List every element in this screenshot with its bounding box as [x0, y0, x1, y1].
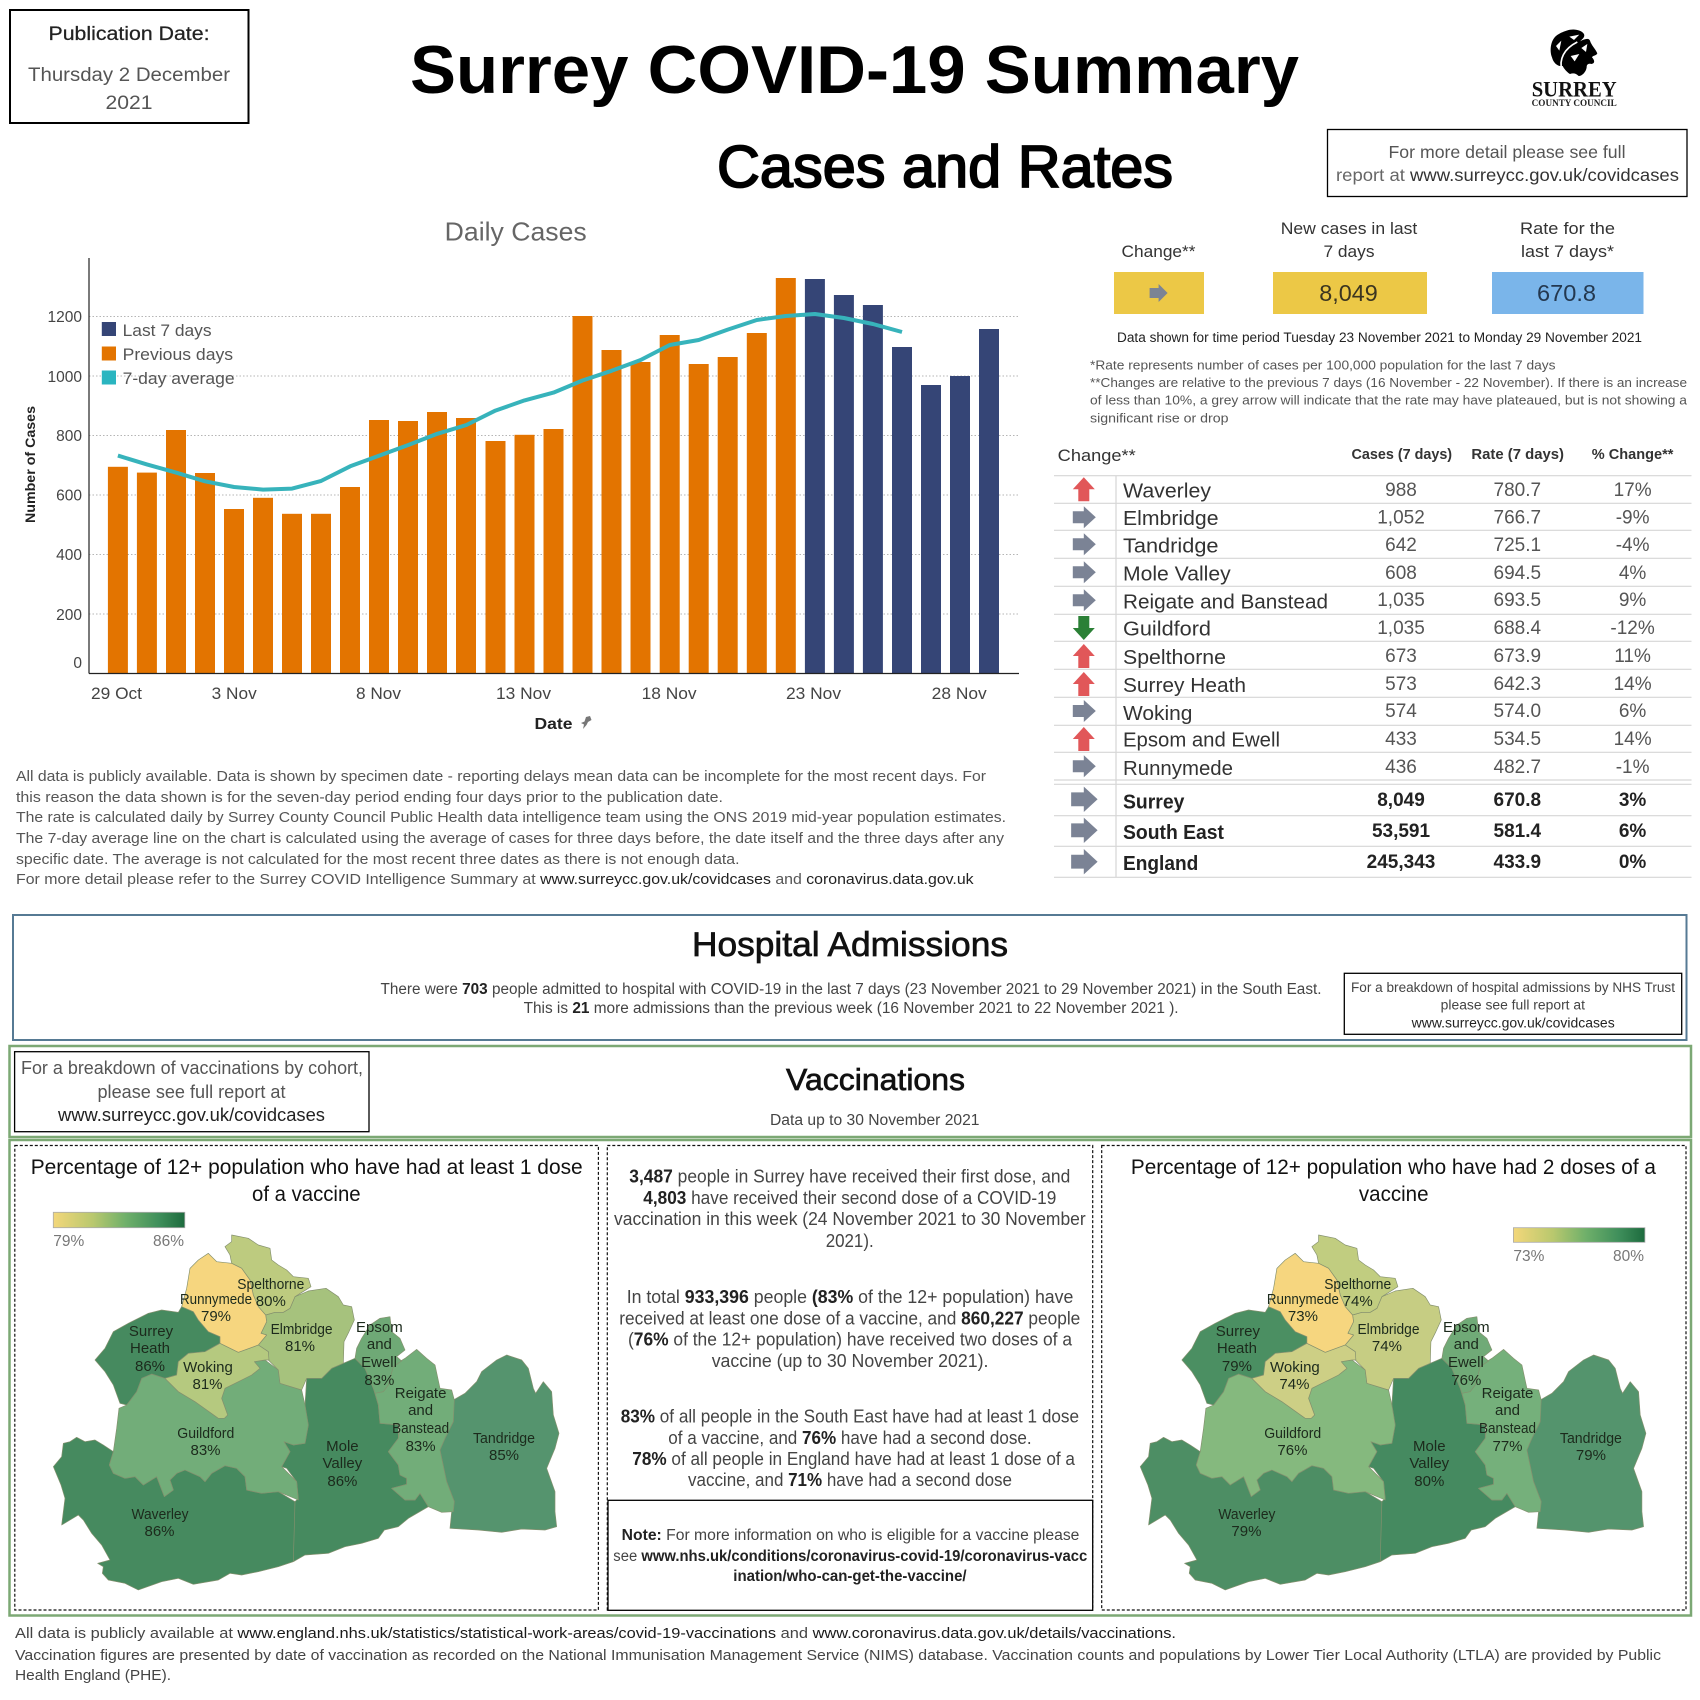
table header [1058, 446, 1674, 465]
x axis labels: 18 Nov [642, 685, 697, 703]
KPI: rate: last 7 days* [1521, 242, 1614, 261]
KPI: rate [1492, 219, 1644, 314]
map labels: second dose: 76% [1451, 1372, 1481, 1389]
row: Epsom and Ewell: 433 [1385, 729, 1417, 750]
row: Surrey Heath: 573 [1385, 674, 1417, 695]
subtitle: cases and rates: Cases and Rates [717, 134, 1173, 200]
regional comparison text: of a vaccine, and 76% have had a second dose. [668, 1428, 1032, 1448]
x axis title: Date [534, 716, 573, 733]
publication date box [10, 10, 248, 123]
weekly doses text: 3,487 people in Surrey have received their first dose, and [629, 1167, 1070, 1187]
row: Waverley: Waverley [1123, 480, 1211, 502]
map labels: first dose: Epsom [356, 1319, 403, 1336]
map labels: first dose: 81% [285, 1338, 315, 1355]
legend: first dose [53, 1212, 185, 1250]
row: Tandridge: -4% [1616, 535, 1650, 556]
row: Surrey Heath [1073, 672, 1652, 697]
y axis labels: 0 [73, 655, 82, 672]
map labels: second dose: Elmbridge [1358, 1321, 1420, 1338]
table header: Change** [1058, 446, 1136, 465]
row: Guildford: 1,035 [1377, 618, 1425, 639]
note box: ination/who-can-get-the-vaccine/ [733, 1568, 967, 1585]
row: England: 245,343 [1367, 852, 1435, 873]
x axis labels: 28 Nov [932, 685, 987, 703]
regional comparison text: 83% of all people in the South East have had at least 1 dose [621, 1406, 1079, 1426]
map labels: second dose: Waverley [1218, 1506, 1276, 1523]
map labels: second dose: Runnymede [1267, 1291, 1339, 1308]
chart legend: Last 7 days [123, 322, 212, 340]
row: Runnymede: Runnymede [1123, 758, 1233, 780]
admissions text: This is 21 more admissions than the previous week (16 November 2021 to 22 November 2021 ). [524, 1000, 1179, 1017]
cumulative doses text [619, 1287, 1080, 1371]
y axis labels [48, 309, 82, 672]
cumulative doses text: (76% of the 12+ population) have received two doses of a [628, 1330, 1073, 1350]
map labels: second dose: and [1454, 1336, 1479, 1353]
x axis labels: 8 Nov [356, 685, 402, 703]
row: Runnymede: -1% [1616, 757, 1650, 778]
heading: hospital admissions: Hospital Admissions [692, 926, 1008, 964]
map labels: second dose: 79% [1231, 1523, 1261, 1540]
row: Runnymede: 436 [1385, 757, 1417, 778]
panel: vaccination summary text [607, 1146, 1093, 1610]
x axis labels: 23 Nov [786, 685, 842, 703]
y axis labels: 400 [56, 547, 82, 564]
chart: daily cases [22, 216, 1019, 733]
row: Elmbridge: Elmbridge [1123, 508, 1218, 530]
row: South East: 53,591 [1372, 821, 1430, 842]
admissions text [380, 981, 1322, 1017]
x axis labels: 13 Nov [496, 685, 552, 703]
bars: last 7 days [805, 279, 999, 673]
callout: NHS trust breakdown: For a breakdown of hospital admissions by NHS Trust [1351, 980, 1675, 995]
row: Waverley: 17% [1614, 480, 1652, 501]
map labels: second dose: Woking [1270, 1359, 1320, 1376]
map labels: second dose: Epsom [1443, 1319, 1490, 1336]
vaccination data sources note: Health England (PHE). [15, 1667, 171, 1684]
data notes under chart [16, 769, 1006, 888]
row: Tandridge: Tandridge [1123, 536, 1218, 558]
map labels: second dose: 74% [1279, 1376, 1309, 1393]
row: Runnymede [1073, 755, 1650, 780]
row: Surrey: Surrey [1123, 792, 1185, 814]
heading: first dose: Percentage of 12+ population who have had at least 1 dose [31, 1156, 583, 1179]
row: Tandridge [1073, 533, 1650, 558]
panel: first dose map [15, 1146, 598, 1610]
callout: more detail [1328, 130, 1687, 196]
row: Mole Valley: 4% [1619, 563, 1646, 584]
table header: Rate (7 days) [1471, 447, 1564, 463]
data notes under chart: specific date. The average is not calculated for the most recent three dates as there is not enough data. [16, 852, 739, 868]
regional comparison text [621, 1406, 1079, 1490]
row: Elmbridge [1073, 506, 1650, 530]
data notes under chart: this reason the data shown is for the seven-day period ending four days prior to the publication date. [16, 790, 723, 806]
row: Spelthorne: 11% [1614, 646, 1651, 667]
table header: % Change** [1592, 447, 1674, 463]
weekly doses text: vaccination in this week (24 November 2021 to 30 November [614, 1209, 1086, 1229]
regional comparison text: vaccine, and 71% have had a second dose [688, 1470, 1012, 1490]
row: Waverley [1073, 477, 1652, 502]
row: Woking [1073, 700, 1646, 725]
row: Woking: 6% [1619, 701, 1646, 722]
row: Mole Valley [1073, 561, 1646, 586]
row: Reigate and Banstead [1073, 589, 1646, 614]
callout: more detail: report at www.surreycc.gov.uk/covidcases [1336, 165, 1679, 185]
data date note: Data up to 30 November 2021 [770, 1112, 980, 1129]
legend: second dose: 73% [1513, 1248, 1544, 1265]
map: second dose by district [1140, 1235, 1646, 1590]
row: Spelthorne [1073, 644, 1651, 669]
map labels: second dose [1216, 1276, 1622, 1540]
map labels: second dose: Surrey [1216, 1323, 1260, 1340]
map labels: first dose: Waverley [132, 1506, 189, 1523]
legend: second dose: 80% [1613, 1248, 1644, 1265]
map labels: second dose: 77% [1492, 1438, 1523, 1455]
map labels: first dose: 81% [192, 1376, 223, 1393]
logo: Surrey County Council [1532, 29, 1617, 108]
map labels: second dose: Tandridge [1560, 1430, 1622, 1447]
row: Mole Valley: 694.5 [1494, 563, 1541, 584]
KPI: rate: 670.8 [1537, 280, 1596, 306]
data notes under chart: For more detail please refer to the Surrey COVID Intelligence Summary at www.surreycc.gov.uk/covidcases and coronavirus.data.gov.uk [16, 872, 974, 888]
row: Elmbridge: 766.7 [1494, 508, 1541, 528]
data notes under chart: All data is publicly available. Data is shown by specimen date - reporting delays mean data can be incomplete for the most recent days. For [16, 769, 986, 785]
row: Woking: 574.0 [1494, 701, 1541, 722]
time period note: Data shown for time period Tuesday 23 November 2021 to Monday 29 November 2021 [1117, 330, 1642, 345]
publication date box: Thursday 2 December [28, 65, 231, 86]
legend: first dose: 79% [53, 1233, 84, 1250]
row: Epsom and Ewell: Epsom and Ewell [1123, 730, 1280, 752]
footnotes: *Rate represents number of cases per 100,000 population for the last 7 days [1090, 358, 1556, 372]
row: Waverley: 988 [1385, 480, 1417, 501]
row: Surrey: 670.8 [1494, 790, 1541, 811]
map labels: second dose: 74% [1343, 1293, 1373, 1310]
row: Reigate and Banstead: 693.5 [1494, 590, 1541, 611]
map labels: first dose: Spelthorne [237, 1276, 304, 1293]
vaccination data sources note: All data is publicly available at www.england.nhs.uk/statistics/statistical-work-areas/covid-19-vaccinations and www.coronavirus.data.gov.uk/details/vaccinations. [15, 1625, 1176, 1642]
x axis labels: 3 Nov [212, 685, 257, 703]
publication date box: 2021 [106, 93, 152, 114]
row: Epsom and Ewell: 534.5 [1494, 729, 1541, 750]
map labels: second dose: 80% [1414, 1473, 1444, 1490]
row: Guildford: -12% [1610, 618, 1655, 639]
vaccination data sources note [15, 1625, 1662, 1684]
row: Guildford: 688.4 [1494, 618, 1542, 639]
callout: NHS trust breakdown: www.surreycc.gov.uk/covidcases [1411, 1015, 1615, 1030]
cumulative doses text: In total 933,396 people (83% of the 12+ population) have [627, 1287, 1073, 1307]
callout: NHS trust breakdown [1344, 973, 1682, 1034]
map labels: second dose: 74% [1372, 1338, 1402, 1355]
map labels: first dose: and [408, 1402, 433, 1419]
map labels: second dose: Valley [1409, 1455, 1450, 1472]
panel: vaccination outer frame [10, 1140, 1691, 1616]
title: Surrey COVID-19 Summary [410, 32, 1299, 108]
row: Mole Valley: Mole Valley [1123, 564, 1231, 586]
callout: vaccination cohort breakdown: For a breakdown of vaccinations by cohort, [21, 1058, 363, 1078]
map labels: second dose: Ewell [1448, 1354, 1484, 1371]
legend: first dose: 86% [153, 1233, 184, 1250]
heading: vaccinations: Vaccinations [786, 1062, 965, 1097]
KPI: change: Change** [1122, 242, 1196, 261]
callout: vaccination cohort breakdown [15, 1052, 369, 1132]
y axis title: Number of Cases [22, 406, 38, 523]
map labels: first dose [129, 1276, 535, 1540]
footnotes: significant rise or drop [1090, 410, 1228, 426]
row: Elmbridge: 1,052 [1377, 508, 1425, 528]
cumulative doses text: received at least one dose of a vaccine, and 860,227 people [619, 1308, 1080, 1328]
footnotes: of less than 10%, a grey arrow will indicate that the rate may have plateaued, but is not showing a [1090, 392, 1688, 408]
logo: Surrey County Council: COUNTY COUNCIL [1532, 98, 1617, 108]
map labels: first dose: Valley [323, 1455, 363, 1472]
row: Guildford [1073, 616, 1655, 640]
heading: second dose: Percentage of 12+ population who have had 2 doses of a [1131, 1156, 1656, 1179]
map labels: first dose: Banstead [392, 1420, 449, 1437]
map: first dose by district [53, 1235, 559, 1590]
weekly doses text: 2021). [826, 1231, 874, 1251]
panel: hospital admissions [13, 915, 1686, 1040]
map labels: second dose: Reigate [1482, 1385, 1533, 1402]
y axis labels: 200 [56, 607, 82, 624]
row: Spelthorne: 673 [1385, 646, 1417, 667]
map labels: first dose: 83% [364, 1372, 394, 1389]
row: England: England [1123, 853, 1198, 875]
row: Elmbridge: -9% [1616, 508, 1650, 528]
map labels: first dose: Runnymede [180, 1291, 252, 1308]
row: Woking: 574 [1385, 701, 1417, 722]
map labels: first dose: Heath [130, 1340, 170, 1357]
row: Guildford: Guildford [1123, 618, 1211, 640]
panel: vaccinations header [10, 1046, 1691, 1137]
x axis labels: 29 Oct [91, 685, 142, 703]
row: England: 0% [1619, 852, 1646, 873]
row: Reigate and Banstead: 1,035 [1377, 590, 1425, 611]
row: Surrey Heath: 14% [1614, 674, 1652, 695]
chart legend: Previous days [123, 346, 233, 364]
map labels: second dose: 76% [1277, 1442, 1307, 1459]
map labels: first dose: 85% [489, 1447, 519, 1464]
row: Woking: Woking [1123, 703, 1192, 725]
row: Reigate and Banstead: 9% [1619, 590, 1646, 611]
map labels: first dose: Tandridge [473, 1430, 535, 1447]
map labels: first dose: 80% [256, 1293, 286, 1310]
KPI: new cases: 8,049 [1319, 280, 1378, 306]
heading: second dose: vaccine [1359, 1183, 1428, 1206]
row: Tandridge: 725.1 [1494, 535, 1541, 556]
chart title: Daily Cases [445, 216, 587, 246]
map labels: second dose: 79% [1576, 1447, 1606, 1464]
cumulative doses text: vaccine (up to 30 November 2021). [712, 1351, 988, 1371]
y axis labels: 800 [56, 428, 82, 445]
heading: first dose [31, 1156, 583, 1206]
y axis labels: 600 [56, 488, 82, 504]
row: Epsom and Ewell: 14% [1614, 729, 1652, 750]
map labels: first dose: 86% [144, 1523, 175, 1540]
map labels: first dose: 86% [327, 1473, 357, 1490]
panel: second dose map [1102, 1146, 1686, 1610]
row: Reigate and Banstead: Reigate and Banstead [1123, 592, 1328, 614]
map labels: first dose: 79% [201, 1308, 231, 1325]
map labels: first dose: Guildford [177, 1425, 234, 1442]
y axis labels: 1200 [48, 309, 82, 326]
table header: Cases (7 days) [1352, 447, 1452, 463]
heading: second dose [1131, 1156, 1656, 1206]
callout: more detail: For more detail please see full [1388, 142, 1626, 162]
row: Surrey: 8,049 [1377, 790, 1425, 811]
KPI: rate: Rate for the [1520, 219, 1615, 238]
map labels: first dose: Elmbridge [271, 1321, 333, 1338]
regional comparison text: 78% of all people in England have had at least 1 dose of a [632, 1449, 1076, 1469]
x axis title [534, 716, 592, 733]
row: South East: 6% [1619, 821, 1646, 842]
data notes under chart: The rate is calculated daily by Surrey County Council Public Health data intelligence team using the ONS 2019 mid-year population estimates. [16, 810, 1006, 826]
map labels: first dose: Ewell [361, 1354, 397, 1371]
row: England [1071, 849, 1646, 875]
publication date box: Publication Date: [48, 24, 210, 45]
chart legend: 7-day average [123, 370, 235, 388]
x axis labels [91, 685, 987, 703]
data notes under chart: The 7-day average line on the chart is calculated using the average of cases for three days before, the date itself and the three days after any [16, 831, 1005, 847]
KPI: change [1114, 242, 1204, 314]
map labels: first dose: Reigate [395, 1385, 446, 1402]
row: Surrey Heath: 642.3 [1494, 674, 1541, 695]
weekly doses text [614, 1167, 1086, 1251]
row: South East [1071, 818, 1646, 844]
map labels: first dose: Woking [183, 1359, 233, 1376]
note box [608, 1500, 1093, 1610]
bars: previous days [108, 278, 796, 673]
axes [89, 258, 1019, 674]
heading: first dose: of a vaccine [252, 1183, 361, 1206]
callout: NHS trust breakdown: please see full report at [1441, 997, 1585, 1012]
map labels: second dose: and [1495, 1402, 1520, 1419]
map labels: second dose: Heath [1217, 1340, 1257, 1357]
map labels: second dose: 79% [1222, 1358, 1252, 1375]
map labels: second dose: 73% [1288, 1308, 1318, 1325]
legend: second dose [1513, 1228, 1645, 1265]
weekly doses text: 4,803 have received their second dose of a COVID-19 [643, 1188, 1056, 1208]
map labels: first dose: Mole [326, 1438, 359, 1455]
chart legend [102, 322, 235, 388]
y axis labels: 1000 [48, 369, 82, 386]
map labels: first dose: and [367, 1336, 392, 1353]
map labels: second dose: Banstead [1479, 1420, 1536, 1437]
logo: Surrey County Council: SURREY [1532, 76, 1617, 102]
map labels: first dose: 83% [190, 1442, 221, 1459]
KPI: new cases: 7 days [1324, 242, 1374, 261]
map labels: first dose: Surrey [129, 1323, 174, 1340]
row: Mole Valley: 608 [1385, 563, 1417, 584]
map labels: second dose: Spelthorne [1324, 1276, 1391, 1293]
map labels: second dose: Mole [1413, 1438, 1446, 1455]
callout: vaccination cohort breakdown: www.surreycc.gov.uk/covidcases [57, 1105, 325, 1125]
callout: vaccination cohort breakdown: please see full report at [98, 1082, 286, 1102]
row: Waverley: 780.7 [1494, 480, 1541, 501]
row: South East: 581.4 [1494, 821, 1542, 842]
table: district cases and rates [1054, 446, 1692, 877]
note box: Note: For more information on who is eligible for a vaccine please [622, 1527, 1079, 1544]
row: England: 433.9 [1494, 852, 1541, 873]
row: Surrey Heath: Surrey Heath [1123, 675, 1246, 697]
row: Tandridge: 642 [1385, 535, 1417, 556]
row: Runnymede: 482.7 [1494, 757, 1541, 778]
KPI: new cases: New cases in last [1281, 219, 1418, 238]
vaccination data sources note: Vaccination figures are presented by date of vaccination as recorded on the National Immunisation Management Service (NIMS) database. Vaccination counts and populations by Lower Tier Local Authority (LTLA) are provided by Public [15, 1647, 1662, 1664]
row: Spelthorne: Spelthorne [1123, 647, 1226, 669]
row: Spelthorne: 673.9 [1494, 646, 1541, 667]
admissions text: There were 703 people admitted to hospital with COVID-19 in the last 7 days (23 November 2021 to 29 November 2021) in the South East. [380, 981, 1322, 998]
row: Surrey: 3% [1619, 790, 1646, 811]
row: Epsom and Ewell [1073, 727, 1652, 752]
7-day average line [118, 314, 902, 490]
row: Surrey [1071, 787, 1646, 814]
map labels: first dose: 83% [406, 1438, 436, 1455]
KPI: new cases [1273, 219, 1427, 314]
map labels: first dose: 86% [135, 1358, 165, 1375]
map labels: second dose: Guildford [1264, 1425, 1321, 1442]
row: South East: South East [1123, 822, 1224, 844]
footnotes [1090, 358, 1688, 426]
footnotes: **Changes are relative to the previous 7 days (16 November - 22 November). If there is an increase [1090, 375, 1687, 390]
note box: see www.nhs.uk/conditions/coronavirus-covid-19/coronavirus-vacc [613, 1548, 1088, 1565]
